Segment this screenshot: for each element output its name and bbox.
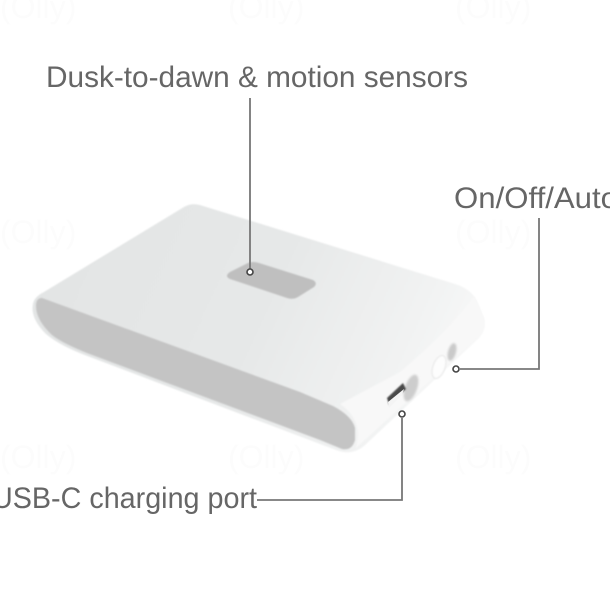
usb-c port — [387, 373, 421, 408]
on/off/auto switch — [429, 342, 458, 380]
faint watermarks — [0, 0, 531, 475]
faint watermarks: (Olly) — [228, 439, 304, 475]
faint watermarks: (Olly) — [455, 439, 531, 475]
label: usb-c charging port: USB-C charging port — [0, 482, 258, 515]
front grey face — [36, 298, 355, 449]
faint watermarks: (Olly) — [0, 439, 76, 475]
device body — [33, 204, 485, 452]
connector: usb-c — [257, 411, 405, 500]
sensor window — [227, 262, 316, 299]
label: on/off/auto: On/Off/Auto — [454, 182, 610, 215]
faint watermarks: (Olly) — [0, 214, 76, 250]
white lower right edge — [340, 296, 484, 448]
connector: sensors — [247, 98, 253, 275]
connector: on/off/auto — [453, 218, 539, 372]
faint watermarks: (Olly) — [455, 214, 531, 250]
label: dusk-to-dawn and motion sensors: Dusk-to-dawn & motion sensors — [46, 61, 468, 94]
device — [33, 204, 485, 452]
